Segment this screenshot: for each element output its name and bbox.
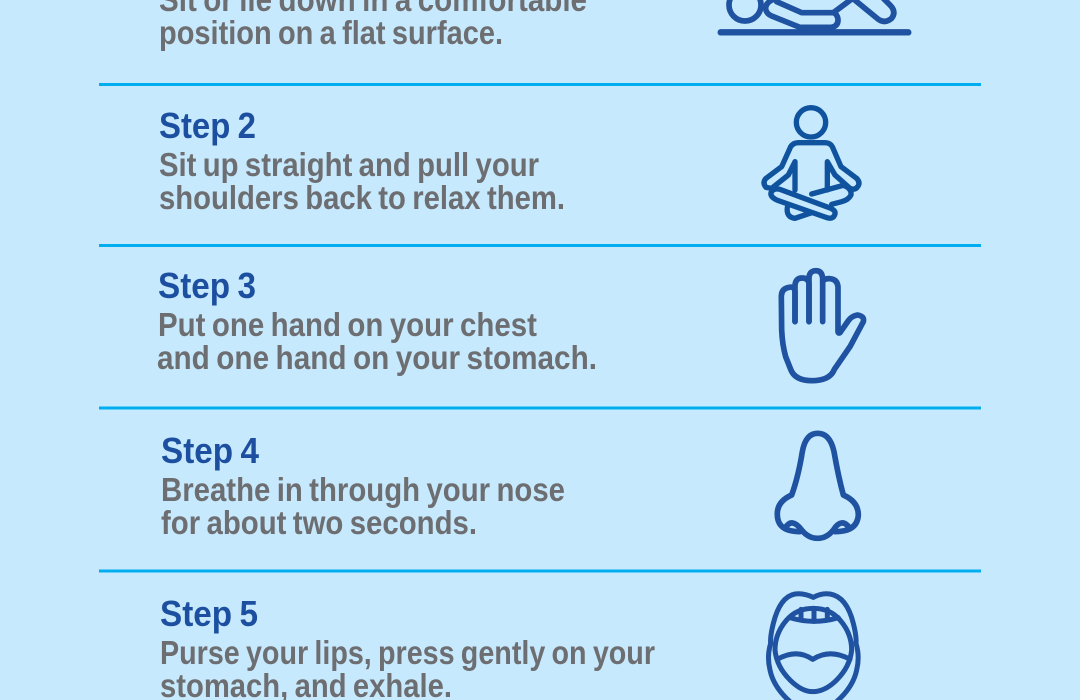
step 3 text: Step 3 [158,265,256,306]
step 1 text: position on a flat surface. [159,14,503,51]
step 1 text [159,0,587,51]
step 4 text [161,430,565,541]
step 2 text: Sit up straight and pull your [159,146,539,183]
icon: nose [777,433,858,538]
step 2 text: shoulders back to relax them. [159,179,565,216]
step 4 text: Breathe in through your nose [161,471,565,508]
step 5 text: Step 5 [160,593,258,634]
step 5 text: Purse your lips, press gently on your [160,634,655,671]
step 3 text [157,265,597,376]
icon: open mouth [768,594,858,700]
step 5 text [160,593,655,700]
step 2 text [159,105,565,216]
step 3 text: Put one hand on your chest [158,306,537,343]
icon: seated meditation [764,108,859,218]
icon: person lying down [721,0,908,32]
step 4 text: for about two seconds. [161,504,477,541]
step 2 text: Step 2 [159,105,256,146]
step 4 text: Step 4 [161,430,259,471]
step 3 text: and one hand on your stomach. [157,339,597,376]
icon: raised hand [781,271,864,381]
